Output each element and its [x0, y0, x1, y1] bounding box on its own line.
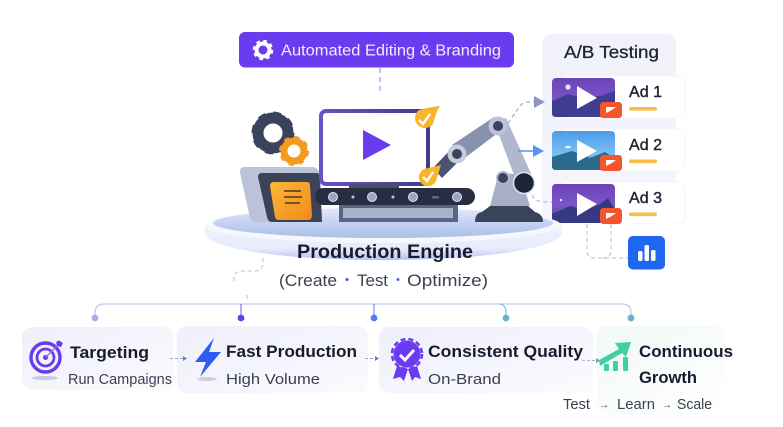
arrow: to Ad 2: [518, 145, 544, 157]
panel heading: A/B Testing: [564, 42, 659, 62]
arrow: consistent quality to growth: [582, 358, 600, 363]
icon: growth chart: [599, 342, 631, 371]
caption: test learn scale: →: [662, 400, 672, 411]
card: continuous growth: [597, 326, 733, 415]
illustration: monitor with play button: [321, 111, 428, 189]
ad card 3: [552, 182, 685, 224]
heading: production engine: Production Engine: [297, 242, 473, 263]
caption: test learn scale: Learn: [617, 397, 655, 413]
platform: [205, 207, 562, 260]
caption: test learn scale: Scale: [677, 397, 712, 413]
ad card 1: [552, 76, 685, 118]
card subtitle: High Volume: [226, 371, 320, 388]
card title: Consistent Quality: [428, 342, 584, 361]
icon: gold check badge bottom: [419, 165, 441, 186]
panel: A/B testing: [542, 34, 685, 224]
illustration: gears: [254, 114, 307, 164]
ad card 2: [552, 129, 685, 171]
card title: Fast Production: [226, 342, 357, 361]
illustration: robot arm: [433, 116, 543, 222]
connector: ads to analytics: [587, 224, 628, 258]
arrow: targeting to fast production: [170, 356, 187, 361]
connector: arm to Ad 3: [532, 195, 552, 202]
card subtitle: Run Campaigns: [68, 371, 172, 388]
ad card 1: Ad 1: [629, 84, 662, 101]
card: fast production: [177, 326, 368, 393]
card title: Continuous: [639, 342, 733, 361]
card title: Targeting: [70, 343, 149, 362]
connector tree: [92, 304, 634, 321]
arrow: fast production to consistent quality: [365, 356, 379, 361]
card subtitle: On-Brand: [428, 371, 501, 388]
subheading: create test optimize: Optimize): [407, 271, 488, 290]
card: continuous growth: Growth: [639, 368, 697, 387]
icon: settings gear: [254, 41, 272, 59]
banner label: Automated Editing & Branding: [281, 42, 501, 60]
icon: orange note: [270, 182, 312, 220]
illustration: conveyor belt: [315, 188, 475, 222]
connector: banner to engine: [379, 68, 381, 95]
ad card 3: Ad 3: [629, 190, 662, 207]
subheading: create test optimize: (Create: [279, 271, 337, 290]
ad card 2: Ad 2: [629, 137, 662, 154]
connector: engine to tree: [234, 258, 263, 302]
subheading: create test optimize: [279, 271, 488, 290]
icon: quality badge: [392, 339, 422, 381]
card: consistent quality: [379, 327, 593, 393]
icon: gold check badge top: [415, 106, 440, 128]
caption: test learn scale: Test: [563, 397, 590, 413]
caption: test learn scale: →: [599, 400, 609, 411]
icon: play: [363, 130, 391, 160]
subheading: create test optimize: Test: [357, 271, 388, 290]
arrow: to Ad 1: [508, 96, 545, 123]
caption: test learn scale: [563, 397, 712, 413]
icon: lightning bolt: [195, 338, 221, 381]
banner: automated editing and branding: [239, 32, 514, 68]
illustration: document tablet: [240, 167, 322, 222]
icon: target: [31, 340, 63, 380]
card: targeting: [22, 327, 173, 390]
icon: analytics bar chart: [628, 236, 665, 270]
